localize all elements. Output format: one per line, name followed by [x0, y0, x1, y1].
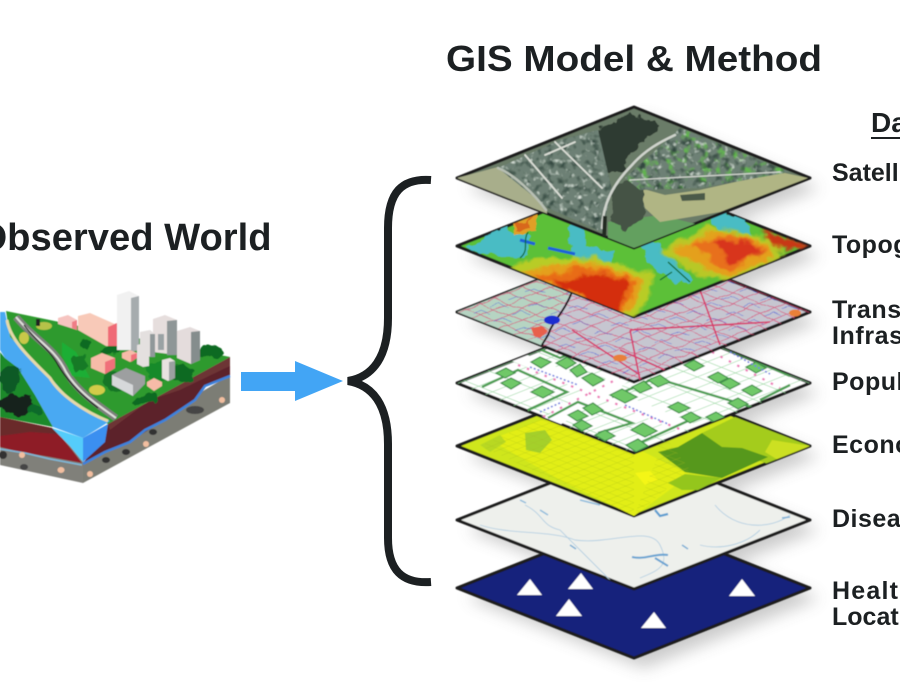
label: transportation infrastructure [832, 296, 900, 350]
layer: disease [454, 482, 812, 591]
layer: population [454, 346, 812, 455]
buildings [58, 291, 200, 396]
layer: transportation infrastructure [454, 278, 812, 384]
layer: economic [454, 414, 812, 518]
far bank forest [0, 352, 53, 427]
right soil face [83, 357, 230, 483]
rivers [480, 500, 790, 585]
land surface [6, 311, 230, 424]
layer: topography [454, 211, 812, 319]
water faces [52, 424, 108, 462]
cross streets [505, 352, 695, 432]
arrow: observed world to model [241, 361, 343, 401]
label: health facility locations [832, 577, 900, 631]
illustration: isometric terrain block [0, 291, 230, 483]
parcels [456, 348, 810, 453]
layer: health facility locations [457, 518, 810, 658]
roads [498, 135, 780, 228]
map layer stack [440, 107, 825, 658]
pink street markings [518, 352, 780, 430]
label column [832, 107, 900, 631]
layer drop shadows [467, 117, 820, 668]
choropleth regions [480, 416, 810, 516]
central high ground [498, 258, 655, 322]
cyan lowlands [468, 212, 756, 284]
left soil face [0, 417, 83, 483]
railway and road [7, 317, 116, 421]
facility markers [517, 573, 755, 628]
curly brace [348, 180, 431, 582]
title: GIS Model & Method: GIS Model & Method [446, 38, 822, 79]
forest patches [596, 112, 660, 230]
trees and lawns [19, 319, 226, 405]
road network [457, 279, 810, 380]
layer: satellite imagery [457, 107, 810, 248]
aerial photo details [457, 112, 808, 248]
river [0, 312, 110, 438]
fields [457, 167, 547, 216]
eastern high ground [660, 225, 812, 285]
elevation colors [468, 212, 812, 322]
town texture [498, 130, 612, 232]
